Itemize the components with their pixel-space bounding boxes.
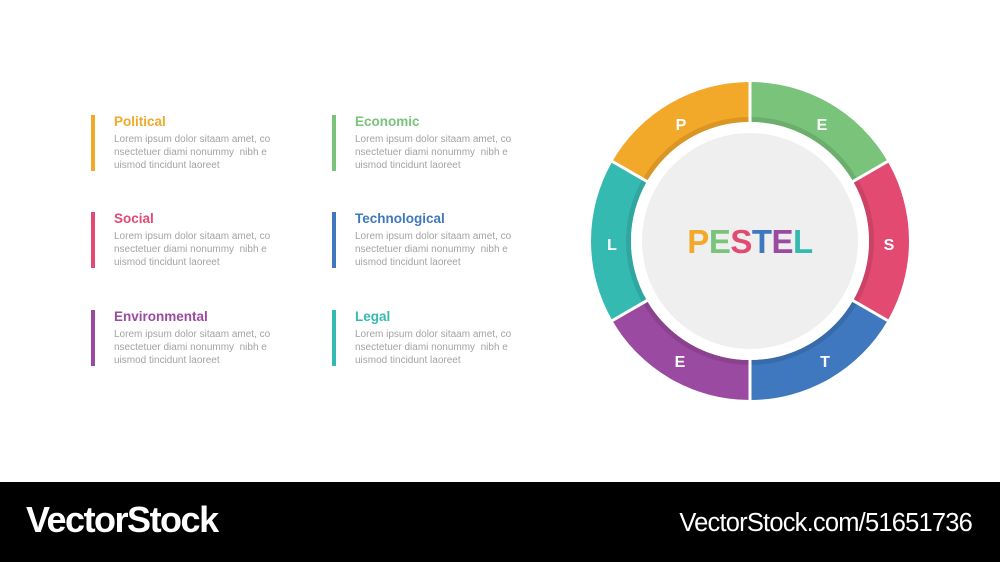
item: Social: Lorem ipsum dolor sitaam amet, co nsectetuer diami nonummy nibh e uismod tincidunt laoreet	[114, 231, 270, 268]
item: Political	[91, 114, 270, 171]
item: Environmental: Environmental	[114, 309, 208, 324]
item: Legal: Legal	[355, 309, 390, 324]
segment letters: L	[607, 237, 617, 254]
segment letters: T	[820, 354, 830, 371]
item: Economic: Economic	[355, 114, 420, 129]
segment letters	[607, 117, 895, 371]
item: Political: Lorem ipsum dolor sitaam amet, co nsectetuer diami nonummy nibh e uismod tincidunt laoreet	[114, 134, 270, 171]
item: Political: Political	[114, 114, 166, 129]
item: Social: Social	[114, 211, 154, 226]
segment letters: E	[817, 117, 828, 134]
item: Technological: Technological	[355, 211, 445, 226]
item: Environmental	[91, 309, 270, 366]
segment letters: E	[675, 354, 686, 371]
center title PESTEL: PESTEL	[687, 223, 813, 260]
segment letters: S	[884, 237, 895, 254]
item: Technological	[332, 211, 511, 268]
footer url: VectorStock.com/51651736	[679, 509, 972, 537]
item: Technological: Lorem ipsum dolor sitaam amet, co nsectetuer diami nonummy nibh e uismod tincidunt laoreet	[355, 231, 511, 268]
item: Environmental: Lorem ipsum dolor sitaam amet, co nsectetuer diami nonummy nibh e uismod tincidunt laoreet	[114, 329, 270, 366]
item: Economic	[332, 114, 511, 171]
item: Social	[91, 211, 270, 268]
item: Economic: Lorem ipsum dolor sitaam amet, co nsectetuer diami nonummy nibh e uismod tincidunt laoreet	[355, 134, 511, 171]
item: Legal	[332, 309, 511, 366]
segment letters: P	[676, 117, 687, 134]
footer logo: VectorStock	[26, 499, 218, 540]
item: Legal: Lorem ipsum dolor sitaam amet, co nsectetuer diami nonummy nibh e uismod tincidunt laoreet	[355, 329, 511, 366]
footer bar	[0, 482, 1000, 562]
